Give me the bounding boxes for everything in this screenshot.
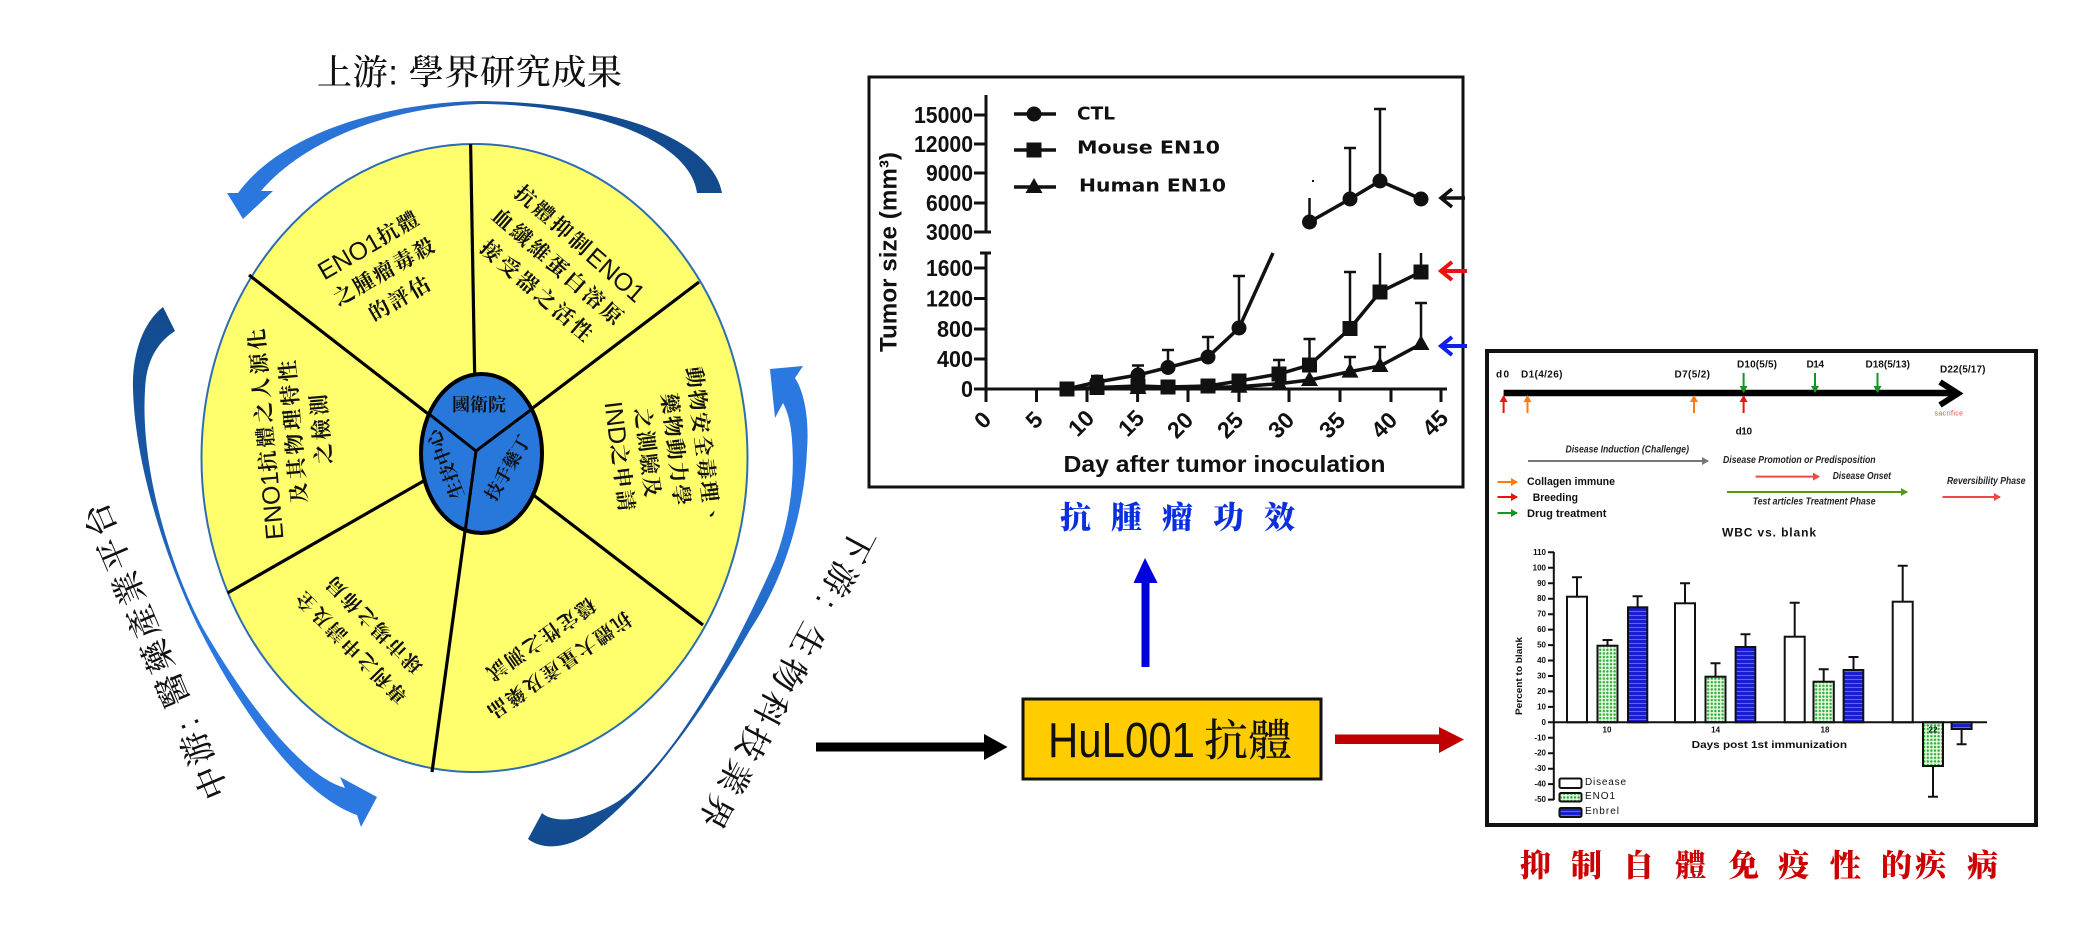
panel: development wheel [202, 144, 748, 772]
y tick labels: 50 [1537, 641, 1547, 650]
timeline legend: Collagen immune [1527, 476, 1615, 488]
x tick labels [969, 405, 1453, 443]
y tick labels: -40 [1534, 780, 1547, 789]
hub: 技手藥丁 [480, 431, 535, 504]
y tick labels: 100 [1533, 563, 1547, 572]
caption: autoimmune suppression: 抑制自體免疫性的疾病 [1520, 848, 1998, 884]
axes [1548, 552, 1987, 800]
bars: group day 22 [1893, 566, 1972, 797]
box: HuL001 antibody [1023, 699, 1321, 779]
y tick labels: 3000 [926, 219, 973, 245]
arrow: up to tumor chart [1134, 558, 1158, 667]
y tick labels: 800 [937, 316, 973, 342]
y tick labels: -30 [1534, 764, 1547, 773]
sector: cytotoxicity: 的評估 [365, 272, 436, 326]
y tick labels: 90 [1537, 579, 1547, 588]
panel: autoimmune study [1487, 351, 2036, 825]
phases: Reversibility Phase [1947, 476, 2026, 487]
y tick labels: 1600 [926, 255, 973, 281]
timeline: D7(5/2) [1674, 370, 1710, 380]
y tick labels: 10 [1537, 702, 1547, 711]
legend: CTL [1077, 104, 1115, 124]
sector: cytotoxicity: 之腫瘤毒殺 [329, 232, 441, 311]
y tick labels [1533, 548, 1547, 804]
bar legend [1560, 777, 1626, 817]
title: upstream: 上游: 學界研究成果 [317, 54, 622, 92]
label: downstream: 下游: 生物科技業界 [692, 521, 882, 835]
bar legend: Enbrel [1585, 806, 1619, 817]
hub: 生技中心 [423, 424, 468, 501]
sector: safety and IND: 之測驗及 [630, 407, 664, 501]
timeline: d0 [1496, 370, 1509, 380]
y tick labels: -50 [1534, 795, 1547, 804]
legend [1014, 104, 1226, 196]
phases: Disease Induction (Challenge) [1566, 444, 1690, 456]
x tick labels: 15 [1113, 405, 1149, 441]
x tick labels: 14 [1711, 726, 1721, 734]
y tick labels: 80 [1537, 594, 1547, 603]
panel: tumor chart [869, 77, 1467, 487]
phases: Disease Onset [1833, 471, 1892, 482]
y tick labels: 9000 [926, 160, 973, 186]
y tick labels: 70 [1537, 610, 1547, 619]
y tick labels: 15000 [914, 102, 973, 128]
x tick labels [1603, 726, 1938, 734]
y tick labels: 30 [1537, 672, 1547, 680]
x tick labels: 40 [1366, 407, 1402, 443]
x tick labels: 5 [1020, 406, 1048, 434]
sector: safety and IND: 藥物動力學 [656, 392, 693, 509]
arrow: upstream curved [227, 101, 722, 219]
y tick labels: 12000 [914, 131, 973, 157]
sector: humanization: 之檢測 [307, 390, 337, 465]
x axis title: Day after tumor inoculation [1064, 451, 1386, 477]
x tick labels: 30 [1263, 407, 1299, 443]
legend: Human EN10 [1079, 176, 1226, 196]
bar legend: ENO1 [1585, 791, 1615, 802]
y tick labels: 0 [1542, 718, 1547, 727]
box: HuL001 antibody: HuL001 [1048, 714, 1195, 768]
x tick labels: 10 [1063, 405, 1099, 441]
sector: plasminogen receptor: 血纖維蛋白溶原 [487, 204, 629, 332]
sector: cytotoxicity [313, 204, 456, 338]
axes [974, 95, 1447, 402]
sector: patents: 專利之申請及全 [290, 585, 413, 708]
caption: anti-tumor efficacy: 抗腫瘤功效 [1060, 500, 1295, 536]
arrow: CTL indicator [1441, 189, 1465, 207]
timeline [1496, 360, 1986, 438]
bars: group day 14 [1675, 583, 1755, 722]
timeline: D10(5/5) [1737, 360, 1777, 370]
y tick labels: -20 [1534, 749, 1547, 758]
bar legend: Disease [1585, 777, 1626, 788]
arrow: wheel to antibody [816, 734, 1008, 760]
series: Human EN10 [1067, 303, 1430, 394]
timeline: D18(5/13) [1866, 360, 1910, 370]
y axis title: Tumor size (mm³) [876, 152, 902, 352]
y tick labels: 1200 [926, 286, 973, 312]
label: midstream: 中游: 醫藥產業平台 [77, 497, 235, 805]
timeline: D14 [1806, 360, 1824, 370]
bars: group day 10 [1567, 577, 1647, 722]
x tick labels: 45 [1417, 405, 1453, 441]
bar chart title: WBC vs. blank [1722, 526, 1816, 540]
y tick labels [914, 102, 973, 402]
sector: safety and IND: IND之申請 [599, 400, 640, 514]
x tick labels: 18 [1821, 726, 1830, 734]
sector: plasminogen receptor [466, 178, 652, 356]
arrow: Human indicator [1441, 337, 1467, 355]
sector: patents: 球市場之佈局 [321, 570, 428, 677]
x tick labels: 22 [1929, 726, 1938, 734]
sector: humanization: 及其物理特性 [276, 356, 312, 504]
timeline legend: Drug treatment [1527, 508, 1607, 520]
hub [421, 374, 542, 533]
bars: group day 18 [1785, 603, 1863, 722]
phases: Test articles Treatment Phase [1753, 496, 1876, 508]
arrow: Mouse indicator [1441, 262, 1467, 280]
arrow: midstream curved [133, 307, 377, 827]
timeline: sacrifice [1934, 410, 1963, 418]
wheel background [202, 144, 748, 772]
x tick labels: 20 [1162, 407, 1198, 443]
timeline: d10 [1736, 426, 1752, 438]
timeline legend [1498, 476, 1615, 520]
sector: plasminogen receptor: 接受器之活性 [475, 235, 600, 348]
x tick labels: 0 [969, 406, 996, 434]
y tick labels: 0 [961, 376, 973, 402]
sector: production: 穩定性之測試 [481, 593, 599, 685]
sector: production: 抗體大量產及藥品 [481, 607, 636, 724]
phases [1528, 444, 2026, 508]
y tick labels: -10 [1534, 733, 1547, 742]
x tick labels: 10 [1603, 726, 1612, 734]
timeline: D1(4/26) [1521, 370, 1562, 380]
timeline legend: Breeding [1533, 492, 1578, 504]
hub: 國衛院 [452, 395, 506, 415]
y tick labels: 40 [1537, 656, 1547, 665]
series: Mouse EN10 [1060, 253, 1428, 396]
legend: Mouse EN10 [1077, 138, 1220, 158]
sector: cytotoxicity: ENO1抗體 [313, 205, 426, 286]
sector: safety and IND: 動物安全毒理、 [681, 366, 724, 528]
x tick labels: 35 [1314, 407, 1350, 443]
x tick labels: 25 [1212, 407, 1248, 443]
series: CTL [1060, 109, 1428, 396]
phases: Disease Promotion or Predisposition [1723, 455, 1876, 466]
sector: humanization: ENO1抗體之人源化 [243, 324, 289, 541]
arrow: antibody to autoimmune panel [1335, 727, 1464, 753]
y tick labels: 6000 [926, 190, 973, 216]
y axis title: Percent to blank [1514, 636, 1524, 715]
sector: humanization [243, 319, 343, 541]
timeline: D22(5/17) [1940, 364, 1986, 376]
arrow: downstream curved [528, 366, 808, 846]
y tick labels: 20 [1537, 687, 1547, 696]
box: HuL001 antibody: 抗體 [1204, 716, 1292, 766]
sector: plasminogen receptor: 抗體抑制ENO1 [508, 179, 650, 308]
x axis title: Days post 1st immunization [1692, 739, 1847, 751]
bar chart [1514, 548, 1987, 817]
y tick labels: 400 [937, 346, 973, 372]
y tick labels: 60 [1537, 625, 1547, 634]
sector: safety and IND [596, 366, 724, 539]
y tick labels: 110 [1533, 548, 1547, 557]
